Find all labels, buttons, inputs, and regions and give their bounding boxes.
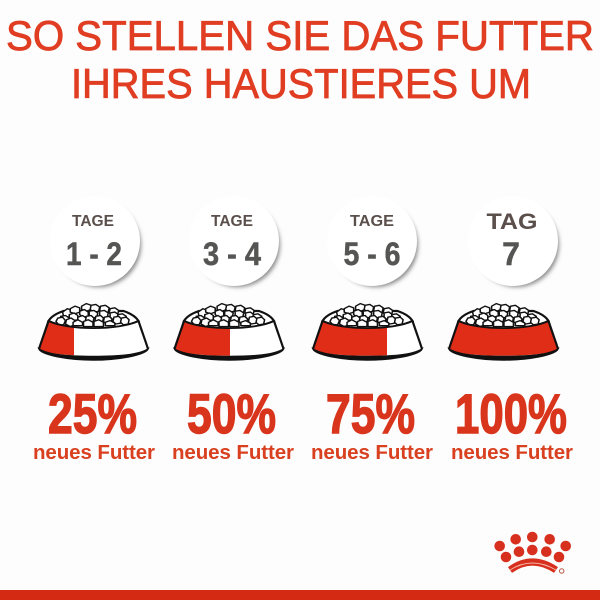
label: neues Futter: neues Futter <box>451 441 573 464</box>
icon: bowl 75% <box>313 304 422 360</box>
step 1: days 1-2 <box>33 196 155 464</box>
badge: Tage 3-4: TAGE <box>211 213 253 230</box>
label: 50%: 50% <box>187 382 276 445</box>
badge: Tage 1-2: TAGE <box>72 213 114 230</box>
icon: bowl 25% <box>39 304 148 360</box>
step 4: day 7 <box>449 196 573 464</box>
badge: Tage 5-6: TAGE <box>350 213 394 230</box>
step 3: days 5-6 <box>311 196 433 464</box>
badge: Tage 1-2: 1 - 2 <box>66 236 122 272</box>
badge: Tage 3-4: 3 - 4 <box>203 236 261 272</box>
label: 25%: 25% <box>48 382 137 445</box>
badge: Tage 3-4 <box>189 196 280 287</box>
label: neues Futter: neues Futter <box>311 441 433 464</box>
title <box>6 12 594 107</box>
badge: Tag 7: TAG <box>486 209 538 234</box>
title: IHRES HAUSTIERES UM <box>71 60 531 107</box>
label: neues Futter: neues Futter <box>33 441 155 464</box>
badge: Tag 7: 7 <box>502 236 520 272</box>
badge: Tage 5-6: 5 - 6 <box>344 236 400 272</box>
logo: crown <box>494 532 571 573</box>
badge: Tage 1-2 <box>50 196 141 287</box>
label: 100%: 100% <box>455 382 567 445</box>
label: 75%: 75% <box>326 382 415 445</box>
badge: Tage 5-6 <box>327 196 418 287</box>
label: neues Futter: neues Futter <box>172 441 294 464</box>
bottom bar <box>0 590 600 600</box>
icon: bowl 100% <box>449 304 558 360</box>
badge: Tag 7 <box>468 196 559 287</box>
icon: bowl 50% <box>174 304 284 360</box>
step 2: days 3-4 <box>172 196 294 464</box>
